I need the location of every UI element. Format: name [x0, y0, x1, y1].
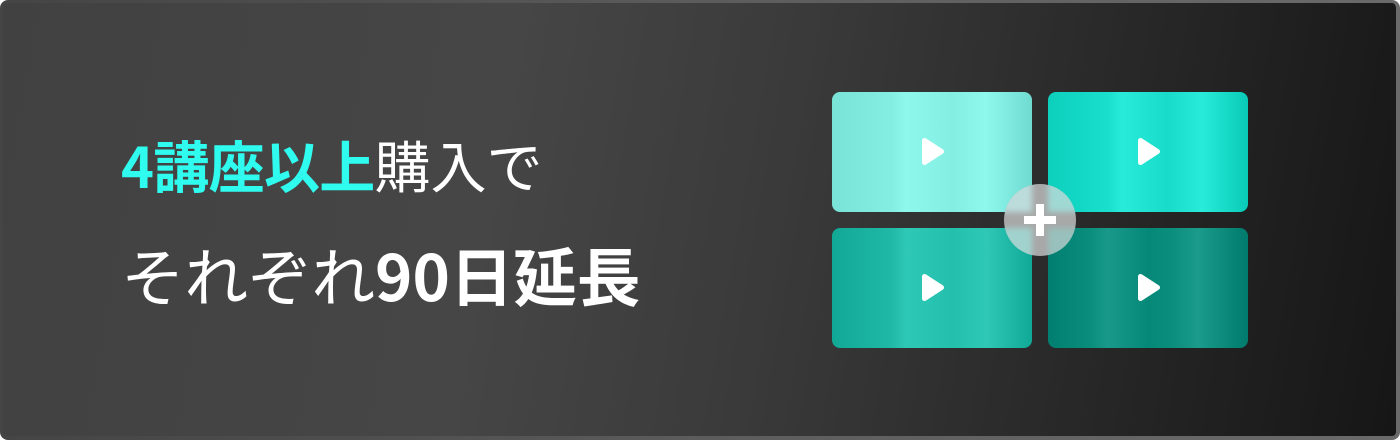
video tile: top left [832, 92, 1032, 212]
video tile: bottom right [1048, 228, 1248, 348]
icon: plus badge [1004, 184, 1076, 256]
icon: play [1138, 138, 1160, 165]
video tile: top right [1048, 92, 1248, 212]
heading line 2: それぞれ90日延長 [121, 228, 640, 320]
heading line 1: 4講座以上購入で [121, 124, 543, 205]
icon: play [1138, 274, 1160, 301]
video tile: bottom left [832, 228, 1032, 348]
icon: play [922, 274, 944, 301]
icon: play [922, 138, 944, 165]
